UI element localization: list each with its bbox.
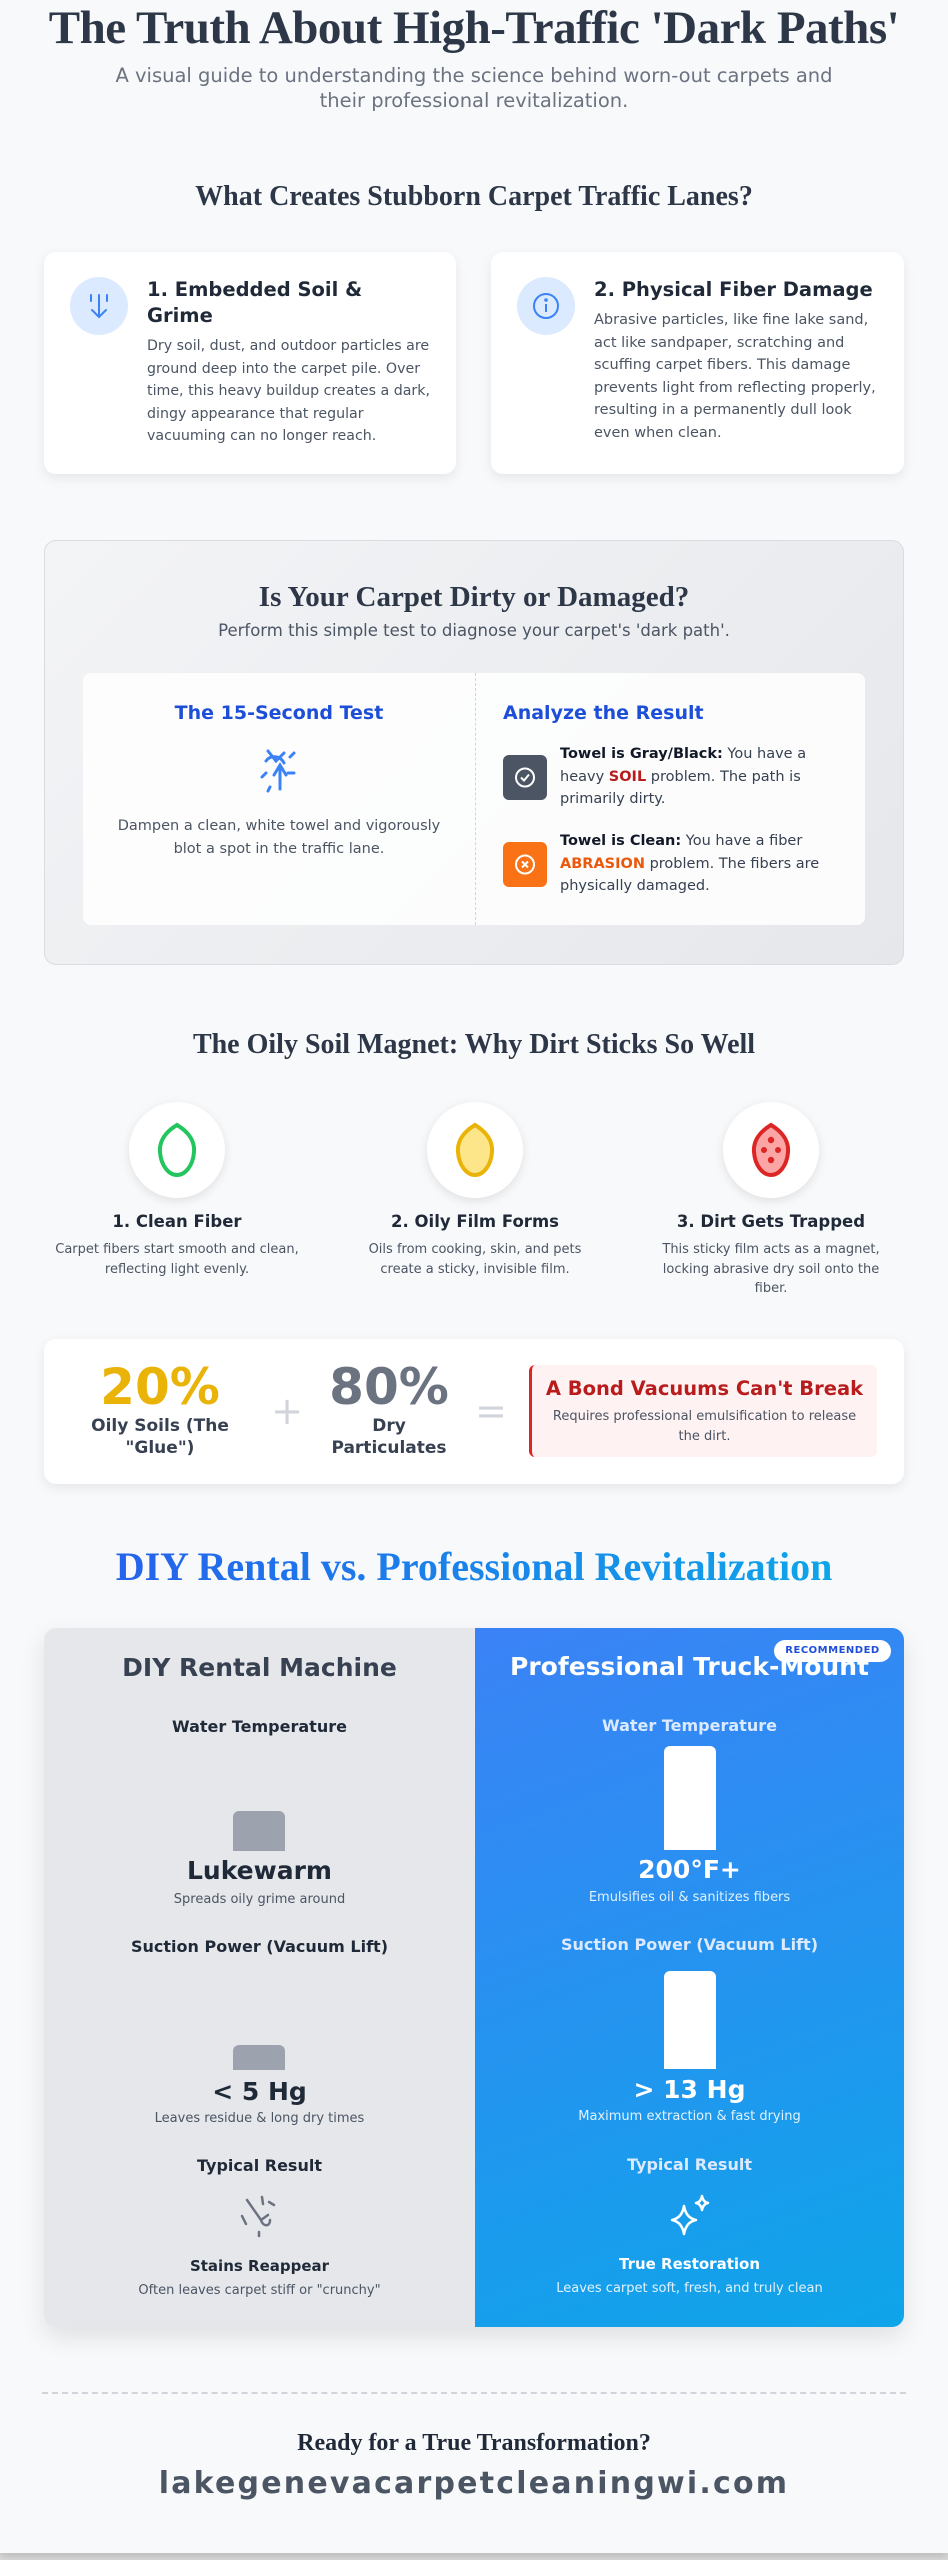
step 2: 2. Oily Film Forms bbox=[391, 1212, 559, 1231]
text: Dampen a clean, white towel and vigorously blot a spot in the traffic lane. bbox=[118, 818, 440, 857]
panel: fiber damage bbox=[491, 252, 904, 474]
panel: comparison bbox=[44, 1628, 904, 2327]
column: professional: > 13 Hg bbox=[634, 2075, 745, 2104]
step 3: This sticky film acts as a magnet, locking abrasive dry soil onto the fiber. bbox=[662, 1242, 880, 1296]
result: abrasion: Towel is Clean: You have a fiber ABRASION problem. The fibers are physically damaged. bbox=[560, 833, 819, 894]
stat: 20%: Oily Soils (The "Glue") bbox=[91, 1416, 229, 1458]
icon: arrow down bbox=[70, 277, 128, 335]
result: soil: Towel is Gray/Black: You have a heavy SOIL problem. The path is primarily dirty. bbox=[560, 746, 806, 807]
stat: 20%: 20% bbox=[100, 1358, 220, 1416]
plus: + bbox=[271, 1389, 303, 1433]
column: professional: True Restoration bbox=[619, 2255, 760, 2273]
bar: lukewarm bbox=[233, 1811, 285, 1851]
heading: Analyze the Result bbox=[503, 702, 704, 724]
panel: soil equation bbox=[44, 1339, 904, 1484]
heading: oily soil: The Oily Soil Magnet: Why Dirt Sticks So Well bbox=[193, 1029, 755, 1060]
step 2: Oils from cooking, skin, and pets create a sticky, invisible film. bbox=[369, 1242, 581, 1276]
column: professional: Suction Power (Vacuum Lift) bbox=[561, 1935, 818, 1954]
column: DIY: Leaves residue & long dry times bbox=[155, 2111, 364, 2126]
heading: The 15-Second Test bbox=[175, 702, 383, 724]
step 1 bbox=[55, 1122, 299, 1276]
column: DIY: Water Temperature bbox=[172, 1717, 347, 1736]
stat: 20% bbox=[91, 1358, 229, 1458]
heading: causes: What Creates Stubborn Carpet Traffic Lanes? bbox=[195, 181, 753, 212]
panel: diagnose bbox=[44, 540, 904, 965]
icon: clean fiber bbox=[129, 1102, 225, 1198]
column: DIY: Lukewarm bbox=[187, 1856, 332, 1885]
heading: Is Your Carpet Dirty or Damaged? bbox=[259, 581, 689, 613]
badge: recommended bbox=[774, 1640, 891, 1662]
footer bbox=[42, 2392, 906, 2502]
test column bbox=[118, 702, 440, 857]
column: DIY bbox=[44, 1628, 475, 2327]
icon: check bbox=[503, 755, 547, 800]
icon: oily fiber bbox=[427, 1102, 523, 1198]
step 3 bbox=[662, 1122, 880, 1296]
column: DIY: Spreads oily grime around bbox=[174, 1892, 345, 1907]
callout bbox=[529, 1365, 877, 1457]
heading: comparison: DIY Rental vs. Professional Revitalization bbox=[116, 1544, 832, 1589]
callout: A Bond Vacuums Can't Break bbox=[546, 1377, 863, 1400]
heading: 2. Physical Fiber Damage bbox=[594, 278, 873, 301]
column: DIY: < 5 Hg bbox=[212, 2077, 307, 2106]
column: DIY: DIY Rental Machine bbox=[122, 1653, 397, 1682]
icon: trapped dirt bbox=[723, 1102, 819, 1198]
equals: = bbox=[475, 1389, 507, 1433]
subtitle: A visual guide to understanding the science behind worn-out carpets and their professional revitalization. bbox=[115, 64, 833, 112]
icon: tap bbox=[260, 749, 296, 793]
column: DIY: Often leaves carpet stiff or "crunchy" bbox=[138, 2283, 381, 2298]
step 3: 3. Dirt Gets Trapped bbox=[677, 1212, 865, 1231]
step 1: 1. Clean Fiber bbox=[112, 1212, 242, 1231]
badge: recommended: RECOMMENDED bbox=[785, 1645, 880, 1656]
stat: 80%: 80% bbox=[329, 1358, 449, 1416]
column: professional: 200°F+ bbox=[638, 1855, 741, 1884]
column: professional: Leaves carpet soft, fresh, and truly clean bbox=[556, 2281, 823, 2296]
column: DIY: Typical Result bbox=[197, 2156, 322, 2175]
bar: 200F bbox=[664, 1746, 716, 1850]
column: professional: Emulsifies oil & sanitizes fibers bbox=[589, 1890, 790, 1905]
bar: suction bbox=[233, 2045, 285, 2070]
step 2 bbox=[369, 1122, 581, 1276]
column: DIY: Suction Power (Vacuum Lift) bbox=[131, 1937, 388, 1956]
column: professional: Water Temperature bbox=[602, 1716, 777, 1735]
column: professional bbox=[475, 1628, 904, 2327]
icon: sparkle bbox=[670, 2194, 710, 2236]
title: The Truth About High-Traffic 'Dark Paths' bbox=[49, 2, 899, 54]
heading: 1. Embedded Soil & Grime bbox=[147, 278, 362, 327]
text: Abrasive particles, like fine lake sand, act like sandpaper, scratching and scuffing carpet fibers. This damage prevents light from reflecting properly, resulting in a permanently dull look even when clean. bbox=[594, 312, 876, 441]
website: lakegenevacarpetcleaningwi.com bbox=[159, 2466, 789, 2501]
column: professional: Typical Result bbox=[627, 2155, 752, 2174]
stat: 80% bbox=[329, 1358, 449, 1458]
icon: info bbox=[517, 277, 575, 335]
step 1: Carpet fibers start smooth and clean, reflecting light evenly. bbox=[55, 1242, 299, 1276]
subheading: Perform this simple test to diagnose your carpet's 'dark path'. bbox=[218, 621, 730, 640]
icon: x bbox=[503, 842, 547, 887]
footer heading: Ready for a True Transformation? bbox=[297, 2430, 651, 2456]
icon: broken bbox=[240, 2196, 276, 2238]
panel: embedded soil bbox=[44, 252, 456, 474]
inner panel bbox=[83, 673, 865, 925]
column: DIY: Stains Reappear bbox=[190, 2257, 329, 2275]
stat: 80%: Dry Particulates bbox=[331, 1416, 447, 1458]
bar: suction bbox=[664, 1971, 716, 2069]
callout: Requires professional emulsification to release the dirt. bbox=[553, 1409, 856, 1444]
column: professional: Professional Truck-Mount bbox=[510, 1652, 869, 1681]
text: Dry soil, dust, and outdoor particles are ground deep into the carpet pile. Over time, this heavy buildup creates a dark, dingy appearance that regular vacuuming can no longer reach. bbox=[147, 338, 430, 444]
results column bbox=[475, 673, 865, 925]
column: professional: Maximum extraction & fast drying bbox=[578, 2109, 801, 2124]
